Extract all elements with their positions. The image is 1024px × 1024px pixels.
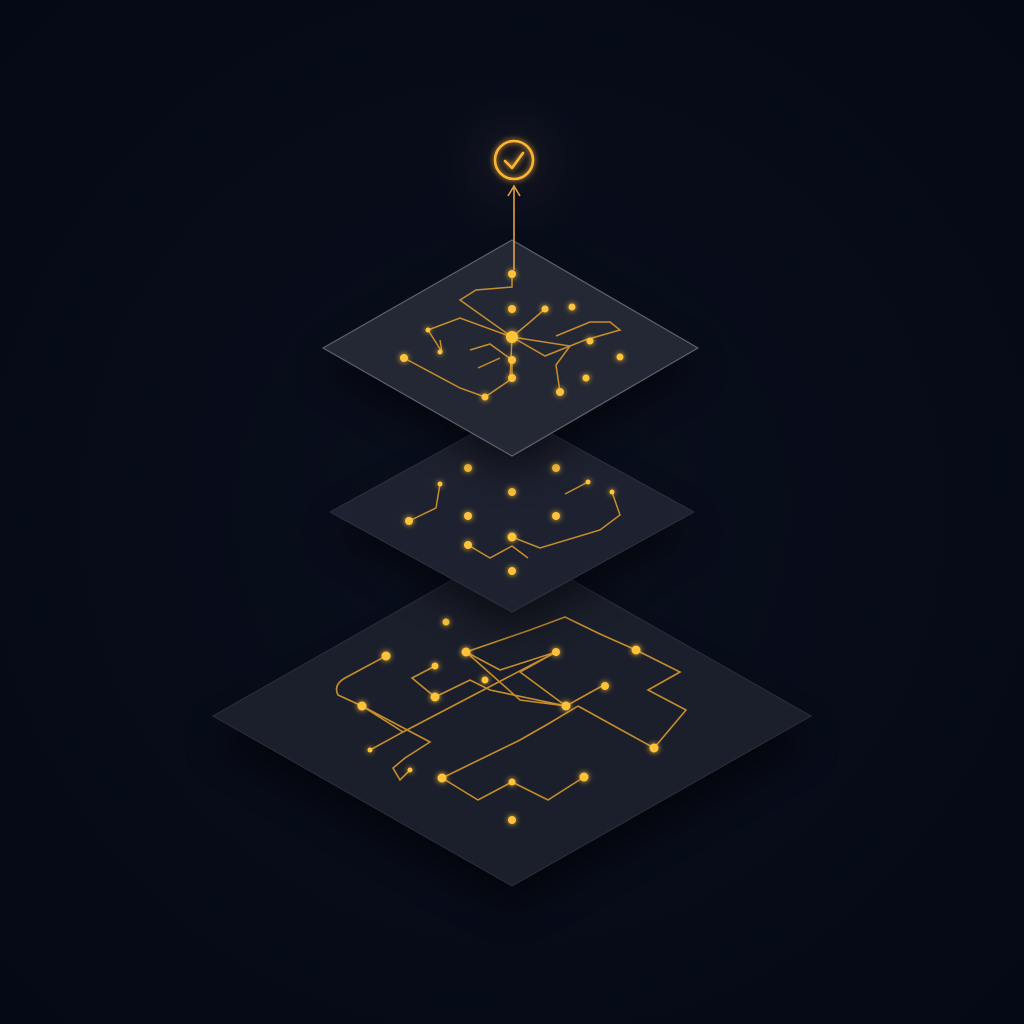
panel: top layer: [323, 240, 698, 476]
panel: bottom layer: [213, 546, 811, 911]
panel: middle layer: [330, 412, 694, 632]
arrow: up to check: [508, 186, 520, 270]
icon: check circle: [495, 141, 533, 179]
